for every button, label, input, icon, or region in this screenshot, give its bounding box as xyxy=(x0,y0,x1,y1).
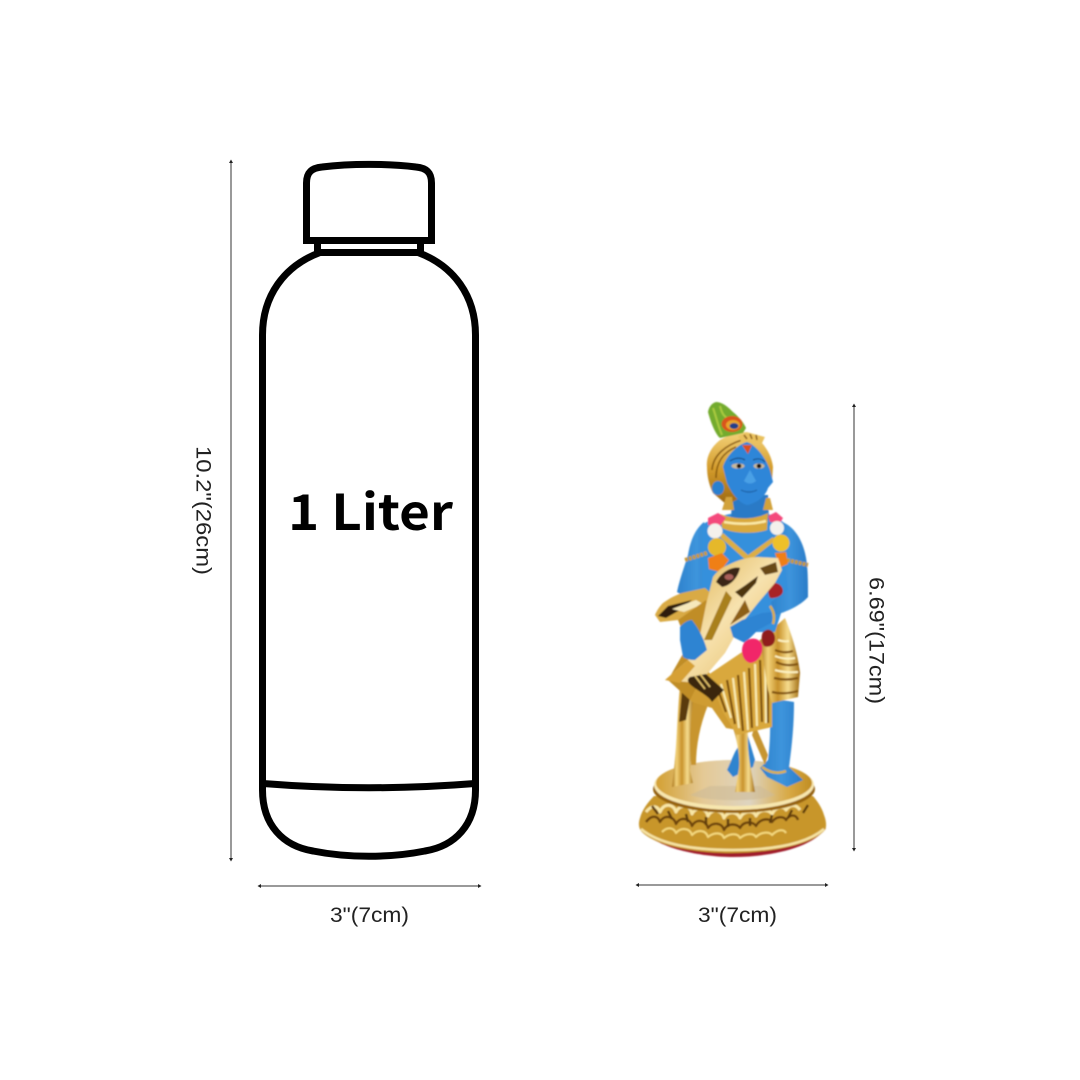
armbands xyxy=(685,553,808,565)
earrings xyxy=(722,497,773,510)
right arm xyxy=(677,522,716,606)
label: bottle height: 10.2"(26cm) xyxy=(192,446,214,575)
hand holding calf: viewer left xyxy=(680,620,707,660)
nose and mouth shading xyxy=(744,470,756,484)
back foot xyxy=(727,733,755,777)
front leg and foot xyxy=(760,698,803,787)
peacock feather xyxy=(708,402,746,438)
garland at waist xyxy=(742,639,762,663)
bangle xyxy=(770,606,774,624)
bottle body xyxy=(262,252,476,856)
bottle cap xyxy=(306,164,432,240)
dhoti right fold xyxy=(760,618,800,703)
red felt xyxy=(640,828,826,857)
calf eye xyxy=(716,568,740,587)
golden calf xyxy=(655,557,782,702)
torso xyxy=(702,512,790,632)
ear xyxy=(712,481,724,495)
label: statue width: 3"(7cm) xyxy=(698,904,777,927)
statue: blue Krishna with golden calf on round base xyxy=(639,402,826,857)
hand holding calf: viewer right xyxy=(730,612,773,643)
calf head and neck xyxy=(665,557,782,683)
label: statue height: 6.69"(17cm) xyxy=(864,577,888,704)
arrow: bottle height xyxy=(229,160,233,862)
calf ear xyxy=(655,588,713,622)
icon: 1 liter bottle outline xyxy=(262,164,476,856)
label: bottle width: 3"(7cm) xyxy=(330,904,409,927)
bottle base line xyxy=(263,784,475,788)
bottle neck xyxy=(318,242,420,252)
left arm xyxy=(771,522,808,615)
arrow: statue width xyxy=(636,883,828,887)
statue base xyxy=(639,760,826,857)
arrow: statue height xyxy=(852,404,856,852)
calf belly xyxy=(680,670,737,730)
face xyxy=(723,442,773,505)
neck xyxy=(731,495,769,520)
calf hidden body xyxy=(668,600,720,700)
gold necklace xyxy=(720,513,775,562)
arrow: bottle width xyxy=(258,884,482,888)
bottle label: 1 Liter xyxy=(288,474,454,545)
turban xyxy=(707,432,773,505)
top disc xyxy=(653,765,815,813)
calf legs xyxy=(672,686,768,792)
tilak xyxy=(742,445,752,454)
eyes xyxy=(730,458,765,469)
dhoti pleats xyxy=(708,640,772,735)
lotus band xyxy=(639,796,826,853)
flower garland xyxy=(708,512,790,598)
